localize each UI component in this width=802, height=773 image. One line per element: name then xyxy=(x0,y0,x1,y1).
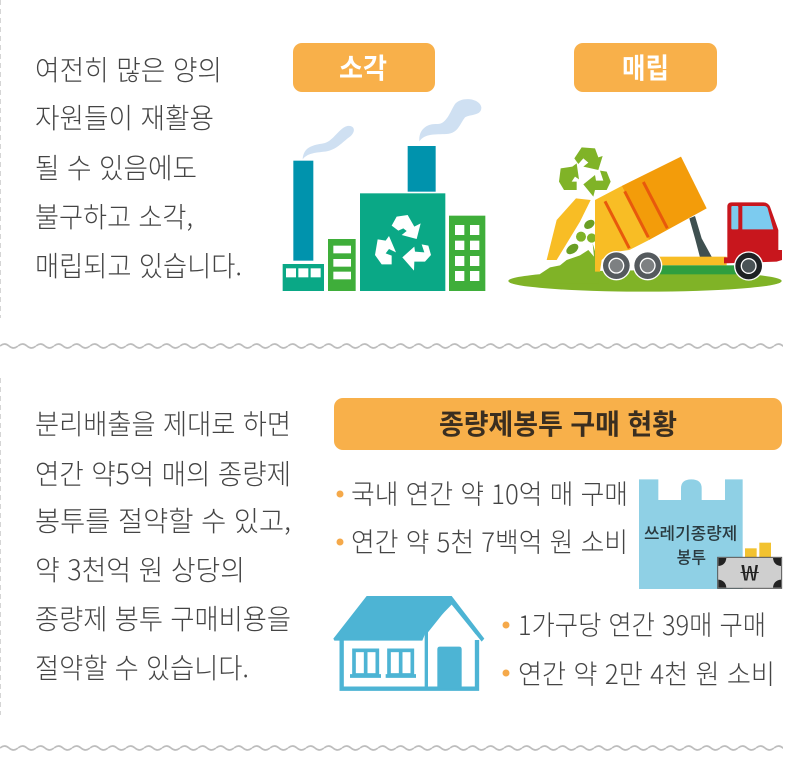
text block: household purchase bullets: 1가구당 연간 39매 구매 xyxy=(518,604,766,643)
heading: 매립 xyxy=(574,43,717,92)
icon: left smoke xyxy=(303,126,354,159)
banknote xyxy=(718,556,782,588)
windows xyxy=(350,650,416,676)
small base building xyxy=(283,264,324,291)
text block: national purchase bullets: 연간 약 5천 7백억 원 소비 xyxy=(351,521,628,560)
green waste pieces xyxy=(564,218,596,256)
bed stripes xyxy=(605,182,667,248)
text block: savings paragraph: 분리배출을 제대로 하면 xyxy=(35,403,291,443)
small green building xyxy=(328,239,356,291)
walls xyxy=(342,640,477,689)
banknote: ₩ xyxy=(740,556,759,588)
text block: household purchase bullets xyxy=(502,604,775,692)
right green building xyxy=(449,216,485,291)
text block: top intro paragraph xyxy=(35,49,242,285)
falling yellow panel xyxy=(547,198,591,260)
bag label: 쓰레기종량제 xyxy=(644,520,737,545)
text block: national purchase bullets xyxy=(336,473,628,560)
text block: top intro paragraph: 불구하고 소각, xyxy=(35,196,193,236)
waste pile xyxy=(540,243,599,283)
dump bed orange xyxy=(622,157,707,240)
main factory building xyxy=(360,193,445,291)
text block: household purchase bullets: 연간 약 2만 4천 원 소비 xyxy=(518,653,775,692)
hydraulic arm xyxy=(689,216,712,257)
text block: savings paragraph: 봉투를 절약할 수 있고, xyxy=(35,500,291,540)
text block: savings paragraph: 종량제 봉투 구매비용을 xyxy=(35,598,291,638)
icon: house xyxy=(333,596,484,689)
icon: right smoke xyxy=(419,99,481,141)
icon: garbage bag with money xyxy=(639,479,782,589)
heading: 매립: 매립 xyxy=(622,47,669,87)
icon: dump truck unloading waste xyxy=(508,147,782,292)
chassis xyxy=(657,257,737,274)
bag label: 봉투 xyxy=(677,543,706,568)
bag label xyxy=(644,520,737,568)
dump bed yellow xyxy=(595,186,649,272)
rear wheel 1 xyxy=(602,251,631,280)
text block: savings paragraph: 절약할 수 있습니다. xyxy=(35,647,249,687)
left chimney xyxy=(293,161,313,261)
ground xyxy=(508,270,782,292)
icon: factory with recycle symbol xyxy=(283,99,485,291)
heading: 종량제봉투 구매 현황 xyxy=(334,398,782,450)
bag xyxy=(639,479,743,589)
gable wall xyxy=(426,600,477,689)
text block: national purchase bullets: 국내 연간 약 10억 매 구매 xyxy=(351,473,628,512)
heading: 소각: 소각 xyxy=(339,47,387,87)
heading: 종량제봉투 구매 현황: 종량제봉투 구매 현황 xyxy=(439,403,677,443)
truck cab xyxy=(724,202,782,263)
text block: savings paragraph xyxy=(35,403,291,687)
text block: savings paragraph: 연간 약5억 매의 종량제 xyxy=(35,453,291,493)
text block: savings paragraph: 약 3천억 원 상당의 xyxy=(35,549,245,589)
text block: top intro paragraph: 여전히 많은 양의 xyxy=(35,49,222,89)
cab windows xyxy=(731,206,773,229)
roof xyxy=(333,596,484,642)
icon: white recycle arrows xyxy=(375,215,431,271)
rear wheel 2 xyxy=(633,251,662,280)
text block: top intro paragraph: 될 수 있음에도 xyxy=(35,147,197,187)
door xyxy=(437,647,462,689)
front wheel xyxy=(734,251,763,281)
text block: top intro paragraph: 매립되고 있습니다. xyxy=(35,245,242,285)
right chimney xyxy=(408,146,436,192)
text block: top intro paragraph: 자원들이 재활용 xyxy=(35,97,214,137)
coins xyxy=(745,543,771,558)
heading: 소각 xyxy=(293,43,435,92)
icon: green recycle arrows xyxy=(559,147,611,197)
